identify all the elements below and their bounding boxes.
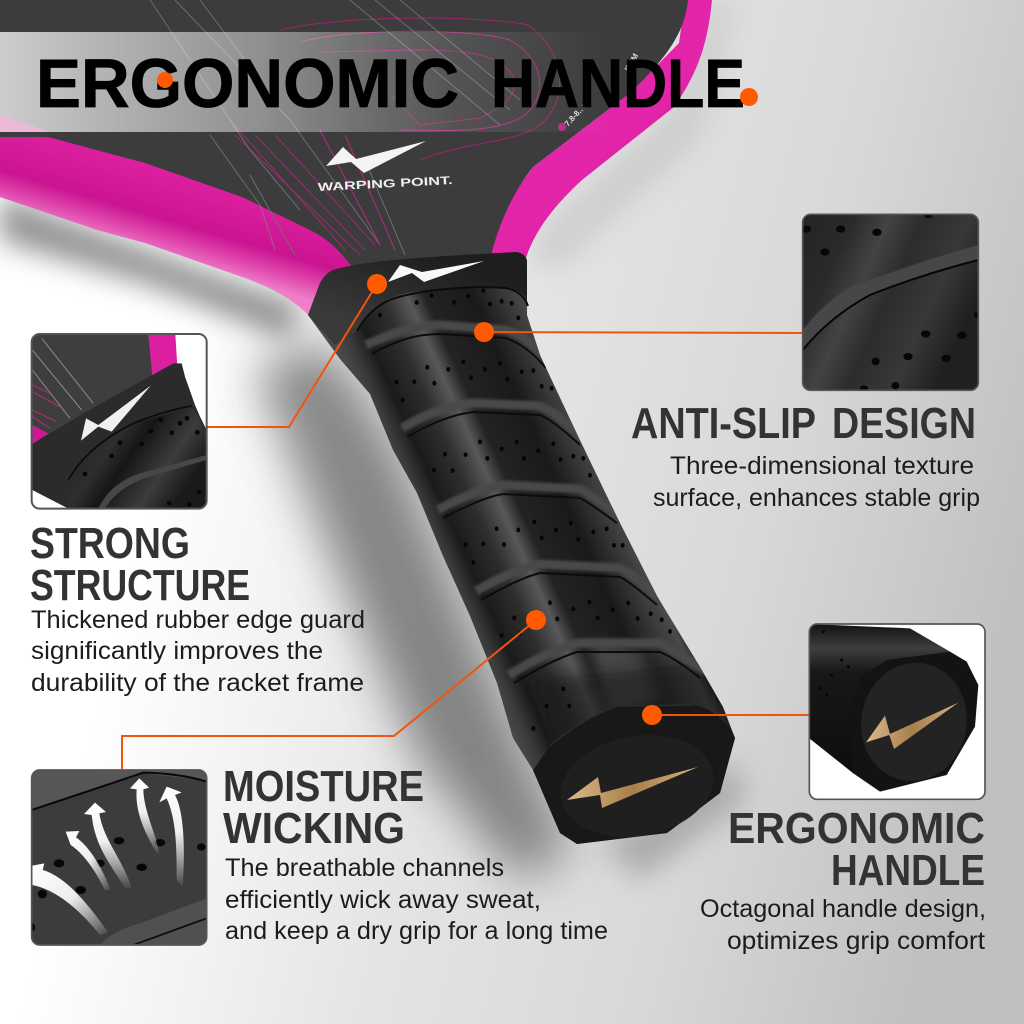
leader: anti-slip bbox=[484, 332, 803, 333]
heading bbox=[223, 762, 424, 853]
brand logo on face bbox=[326, 141, 426, 173]
heading: STRUCTURE bbox=[30, 561, 250, 610]
pink edge guard bbox=[0, 120, 360, 318]
callout dots bbox=[367, 274, 662, 725]
text block: anti-slip design bbox=[631, 399, 980, 512]
face line art bbox=[150, 0, 560, 255]
title: ERGONOMIC bbox=[36, 45, 459, 122]
leader: ergonomic handle bbox=[652, 714, 810, 716]
paddle head with pink edge guard bbox=[0, 0, 712, 318]
heading bbox=[728, 804, 985, 895]
title bbox=[36, 45, 745, 122]
description: Three-dimensional texture bbox=[670, 452, 974, 480]
brand wordmark: WARPING POINT. bbox=[318, 175, 453, 194]
text block: strong structure bbox=[30, 519, 365, 697]
grip perforation dots bbox=[378, 288, 672, 731]
heading: HANDLE bbox=[831, 846, 985, 895]
grip body bbox=[308, 252, 735, 844]
heading: MOISTURE bbox=[223, 762, 424, 811]
right pink edge bbox=[490, 0, 712, 258]
description: and keep a dry grip for a long time bbox=[225, 917, 608, 945]
gold bolt logo bbox=[567, 767, 698, 808]
description: efficiently wick away sweat, bbox=[225, 886, 541, 914]
description bbox=[31, 606, 365, 697]
heading bbox=[631, 399, 976, 448]
octagonal butt cap bbox=[533, 705, 735, 849]
top collar bbox=[308, 252, 528, 345]
title: HANDLE bbox=[491, 45, 745, 122]
collar logo bbox=[388, 261, 484, 282]
leader: moisture wicking bbox=[122, 620, 536, 769]
description bbox=[225, 854, 608, 945]
description: Thickened rubber edge guard bbox=[31, 606, 365, 634]
callout leader lines and dots bbox=[122, 274, 810, 769]
panel: moisture wicking thumbnail bbox=[30, 770, 207, 945]
description: surface, enhances stable grip bbox=[653, 484, 980, 512]
description bbox=[653, 452, 980, 512]
panel: anti-slip thumbnail bbox=[802, 214, 979, 391]
orange accent dots bbox=[157, 72, 758, 106]
airflow arrows bbox=[32, 778, 184, 935]
panel: ergonomic handle thumbnail bbox=[809, 624, 985, 799]
panel: strong structure thumbnail bbox=[32, 334, 207, 509]
heading: STRONG bbox=[30, 519, 190, 568]
black paddle face bbox=[0, 0, 688, 275]
text block: ergonomic handle bbox=[700, 804, 986, 955]
title banner bbox=[0, 32, 760, 132]
description: optimizes grip comfort bbox=[727, 927, 985, 955]
heading bbox=[30, 519, 250, 610]
description: significantly improves the bbox=[31, 637, 323, 665]
description: Octagonal handle design, bbox=[700, 895, 986, 923]
heading: ANTI-SLIP bbox=[631, 399, 816, 448]
weight spec text: 7.8-8.. oz bbox=[563, 97, 592, 128]
handle bbox=[308, 252, 735, 849]
description bbox=[700, 895, 986, 955]
heading: ERGONOMIC bbox=[728, 804, 985, 853]
text block: moisture wicking bbox=[223, 762, 608, 945]
description: durability of the racket frame bbox=[31, 669, 364, 697]
heading: DESIGN bbox=[832, 399, 976, 448]
heading: WICKING bbox=[223, 804, 405, 853]
spec text: IPFM bbox=[623, 52, 640, 73]
sweat holes bbox=[30, 837, 206, 931]
leader: strong structure bbox=[207, 284, 377, 427]
description: The breathable channels bbox=[225, 854, 504, 882]
grip bands bbox=[366, 325, 706, 683]
